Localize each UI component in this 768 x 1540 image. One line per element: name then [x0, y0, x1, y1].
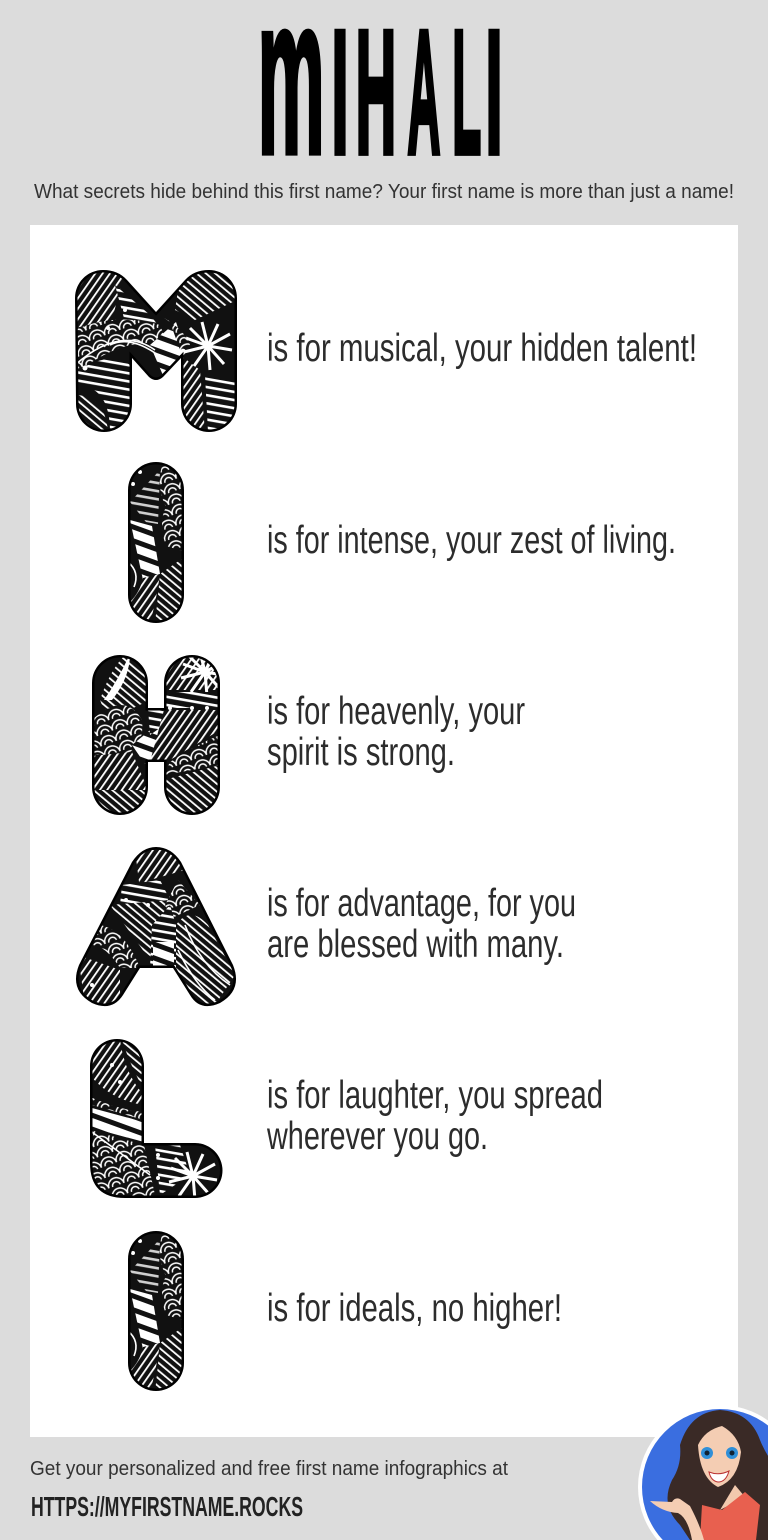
icon: letter I second — [128, 1231, 186, 1392]
subtitle: What secrets hide behind this first name? Your first name is more than just a name! — [34, 181, 734, 203]
text: H lines: spirit is strong. — [267, 731, 455, 774]
panel: letters card — [30, 225, 738, 1437]
text: second I line: is for ideals, no higher! — [267, 1287, 562, 1330]
title: A — [408, 0, 440, 191]
footer text: Get your personalized and free first name infographics at — [30, 1458, 508, 1480]
text: H lines: is for heavenly, your — [267, 690, 525, 733]
icon: letter A — [76, 847, 236, 1006]
text: A lines: is for advantage, for you — [267, 882, 576, 925]
icon: letter I — [128, 462, 186, 623]
text: L lines — [266, 1074, 603, 1158]
icon: letter H — [92, 655, 220, 815]
text: H lines — [267, 690, 525, 774]
text: A lines — [267, 882, 576, 966]
text: L lines: wherever you go. — [266, 1115, 488, 1158]
title: L — [452, 0, 481, 191]
icon: letter L — [90, 1039, 222, 1198]
icon: letter M — [75, 270, 237, 432]
icon: avatar — [638, 1405, 768, 1540]
title — [258, 0, 503, 201]
text: A lines: are blessed with many. — [267, 923, 564, 966]
footer url: HTTPS://MYFIRSTNAME.ROCKS — [31, 1491, 303, 1522]
text: L lines: is for laughter, you spread — [267, 1074, 603, 1117]
